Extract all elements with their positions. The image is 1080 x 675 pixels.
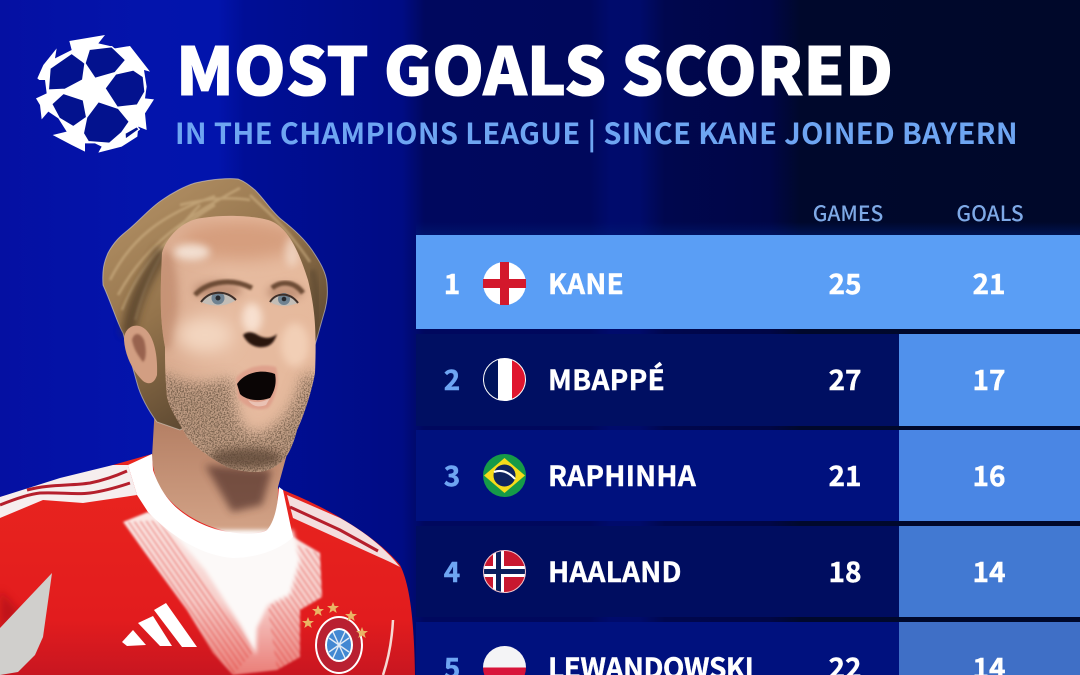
jersey trim [383, 620, 393, 675]
cheek highlight [177, 317, 233, 353]
eyes and eyebrows [195, 282, 303, 306]
eye sockets [194, 281, 242, 299]
left shoulder stripes [0, 465, 137, 518]
table row 5: Lewandowski [416, 622, 1080, 675]
beard stubble [166, 368, 315, 472]
left temple shade [161, 250, 180, 350]
table row 4: Haaland: HAALAND [548, 550, 682, 590]
mouth [236, 365, 278, 410]
jersey print fading into red [123, 512, 322, 675]
flag: Poland [483, 646, 526, 675]
white chest panel [150, 515, 300, 655]
forehead tone [180, 220, 300, 260]
table row 3: Raphinha: 16 [972, 454, 1006, 494]
right shoulder stripes [287, 495, 400, 567]
jersey body [0, 454, 415, 675]
subtitle: IN THE CHAMPIONS LEAGUE | SINCE KANE JOINED BAYERN [175, 111, 1018, 153]
nose shadow [243, 332, 277, 347]
flag: England [483, 262, 526, 305]
column header: games: GAMES [813, 198, 883, 228]
table row 4: Haaland: 18 [828, 550, 862, 590]
ear [124, 326, 157, 383]
jersey fold shadow [0, 590, 20, 630]
table row 3: Raphinha: 21 [828, 454, 862, 494]
beard tone [166, 370, 315, 472]
illustration: player portrait [0, 178, 415, 675]
table row 3: Raphinha: RAPHINHA [548, 454, 696, 494]
chin shadow [210, 448, 282, 468]
logo: three stripes [122, 603, 197, 647]
hair [103, 179, 327, 430]
table row 1: Kane [416, 235, 1080, 329]
flag: France [483, 358, 526, 401]
table row 2: Mbappé [416, 334, 1080, 426]
icon: Champions League starball [36, 35, 154, 153]
table row 1: Kane: 1 [444, 263, 460, 303]
table row 4: Haaland [416, 526, 1080, 617]
table row 2: Mbappé: MBAPPÉ [548, 359, 665, 399]
table row 1: Kane: KANE [548, 263, 624, 303]
table row 1: Kane: 25 [828, 263, 862, 303]
flag: Norway [483, 550, 526, 593]
nose highlight [242, 303, 262, 333]
table row 3: Raphinha: 3 [444, 454, 460, 494]
table row 1: Kane: 21 [972, 263, 1006, 303]
collar [128, 454, 293, 558]
table row 2: Mbappé: 17 [972, 359, 1006, 399]
neck shadow [205, 465, 272, 512]
table row 2: Mbappé: 27 [828, 359, 862, 399]
table row 4: Haaland: 4 [444, 550, 460, 590]
table row 3: Raphinha [416, 430, 1080, 521]
table row 2: Mbappé: 2 [444, 359, 460, 399]
club crest [302, 602, 368, 674]
sleeve panel [0, 573, 52, 675]
table row 4: Haaland: 14 [972, 550, 1006, 590]
face [160, 216, 316, 472]
title: MOST GOALS SCORED [176, 19, 893, 115]
column header: goals: GOALS [956, 198, 1024, 228]
flag: Brazil [483, 454, 526, 497]
forehead shine [174, 244, 210, 260]
neck [152, 405, 295, 533]
